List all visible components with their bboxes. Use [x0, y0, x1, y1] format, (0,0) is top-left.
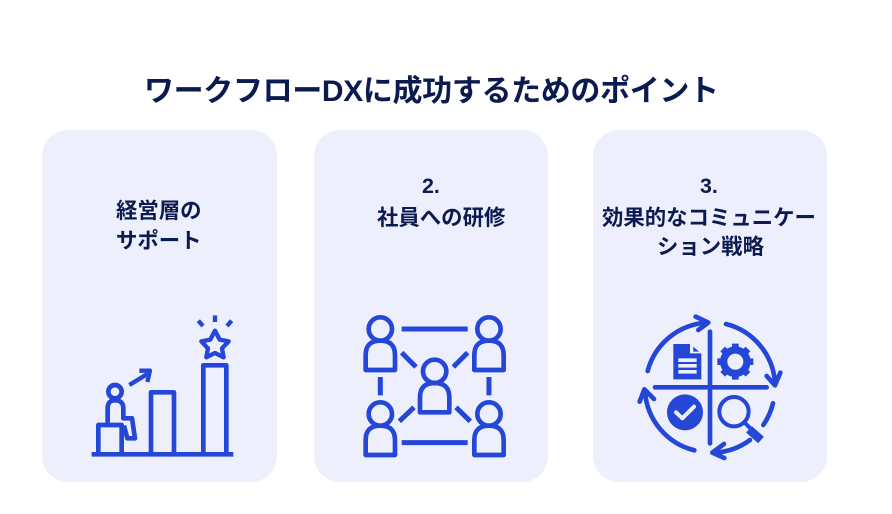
heading: communication strategy: [602, 174, 816, 259]
gear: [717, 344, 753, 380]
panel: employee training: [314, 130, 548, 482]
person top left: [366, 317, 395, 370]
person top right: [474, 317, 504, 370]
heading: communication strategy: 効果的なコミュニケー: [602, 206, 816, 230]
heading: executive support: 経営層の: [116, 199, 202, 223]
panel: executive support: [42, 130, 277, 482]
icon: communication cycle: [640, 317, 780, 458]
person bottom right: [474, 402, 504, 455]
person centre: [420, 360, 449, 412]
heading: employee training: 2.: [422, 174, 440, 198]
heading: employee training: 社員への研修: [377, 206, 505, 230]
icon: person climbing bars to star: [92, 315, 233, 454]
title: ワークフローDXに成功するためのポイント: [144, 75, 719, 108]
icon: connected team of people: [366, 317, 504, 455]
heading: communication strategy: ション戦略: [657, 235, 764, 259]
check badge: [667, 394, 703, 430]
document: [673, 344, 701, 379]
person bottom left: [366, 402, 395, 455]
heading: executive support: サポート: [116, 229, 202, 253]
heading: communication strategy: 3.: [700, 174, 718, 198]
panel: communication strategy: [593, 130, 827, 482]
heading: employee training: [377, 174, 506, 230]
heading: executive support: [116, 199, 202, 253]
magnifier: [719, 397, 761, 440]
